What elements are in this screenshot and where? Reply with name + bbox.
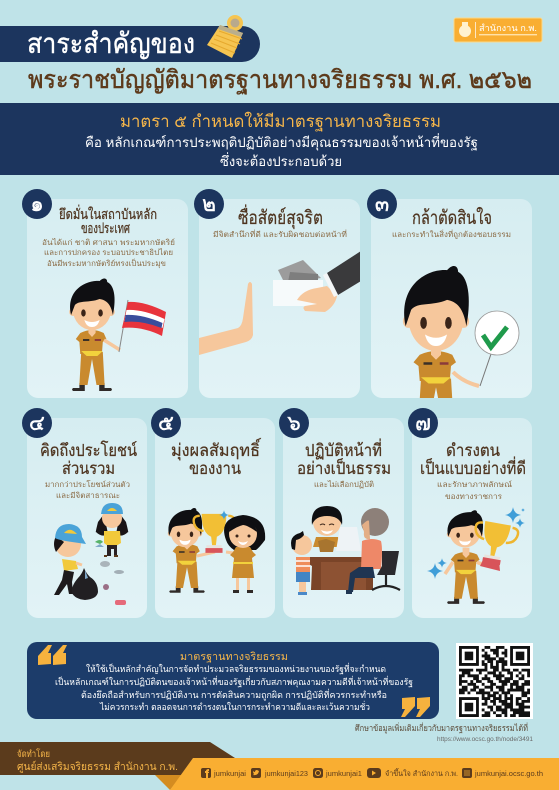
panel: card 1: อันได้แก่ ชาติ ศาสนา พระมหากษัตริย์ <box>42 238 175 247</box>
icon: opening quote <box>38 645 67 665</box>
panel: quote <box>27 642 439 719</box>
icon: twitter <box>251 768 261 778</box>
icon: stamp <box>207 15 243 58</box>
panel: card 3: กล้าตัดสินใจ <box>412 207 492 229</box>
panel: card 2 <box>194 189 361 398</box>
badge 3 <box>367 189 397 219</box>
footer: social links <box>170 758 559 790</box>
badge 1 <box>22 189 52 219</box>
illustration: officer serving citizens at desk <box>291 506 400 595</box>
panel: card 6: ปฏิบัติหน้าที่ <box>305 438 382 460</box>
footer: producer: จัดทำโดย <box>17 748 50 760</box>
title banner <box>0 26 260 62</box>
illustration: officer with Thai flag <box>69 278 166 391</box>
badge 2 <box>194 189 224 219</box>
panel: card 6: อย่างเป็นธรรม <box>297 457 391 478</box>
logo: OCSC <box>454 18 542 42</box>
panel: card 1 <box>22 189 188 398</box>
badge 2: ๒ <box>202 193 216 216</box>
footer: producer <box>0 742 235 790</box>
panel: card 1: และการปกครอง ระบอบประชาธิปไตย <box>44 248 173 257</box>
panel: card 2: มีจิตสำนึกที่ดี และรับผิดชอบต่อหน้าที่ <box>213 229 347 239</box>
icon: youtube <box>367 768 381 778</box>
panel: card 4: มากกว่าประโยชน์ส่วนตัว <box>45 480 130 489</box>
badge 7 <box>408 408 438 438</box>
panel: card 3: และกระทำในสิ่งที่ถูกต้องชอบธรรม <box>392 229 511 239</box>
footer: social links: jumkunjai1 <box>325 769 362 778</box>
panel: card 4: คิดถึงประโยชน์ <box>40 440 137 460</box>
panel: quote: ไม่ควรกระทำ ตลอดจนการดำรงตนในการกระทำความดีและละเว้นความชั่ว <box>99 700 370 712</box>
panel: card 7: ดำรงตน <box>446 441 500 460</box>
panel: card 5: มุ่งผลสัมฤทธิ์ <box>171 438 262 461</box>
panel: quote: ต้องยึดถือสำหรับการปฏิบัติงาน การตัดสินความถูกผิด การปฏิบัติที่ควรกระทำหรือ <box>81 688 387 701</box>
QR caption: https://www.ocsc.go.th/node/3491 <box>437 737 534 743</box>
panel: card 1: อันมีพระมหากษัตริย์ทรงเป็นประมุข <box>47 258 166 268</box>
icon: website <box>462 768 472 778</box>
panel: card 3 <box>367 189 532 398</box>
panel: card 5 <box>151 408 275 618</box>
footer: social links: จำขึ้นใจ สำนักงาน ก.พ. <box>385 768 458 778</box>
illustration: refusing a bribe <box>199 251 361 355</box>
panel: card 5: ของงาน <box>189 459 241 478</box>
panel: quote: เป็นหลักเกณฑ์ในการปฏิบัติตนของเจ้าหน้าที่ของรัฐเกี่ยวกับสภาพคุณงามความดีที่เจ้าหน้าที่ของรัฐ <box>55 675 413 688</box>
badge 7: ๗ <box>415 412 431 435</box>
title banner: สาระสำคัญของ <box>27 28 195 59</box>
footer: social links: jumkunjai <box>213 769 246 778</box>
badge 4: ๔ <box>29 412 45 435</box>
QR code <box>456 643 533 719</box>
icon: instagram <box>313 768 323 778</box>
panel: section 5 band: คือ หลักเกณฑ์การประพฤติปฏิบัติอย่างมีคุณธรรมของเจ้าหน้าที่ของรัฐ <box>85 133 478 151</box>
panel: card 7 <box>408 408 532 618</box>
footer: social links: jumkunjai123 <box>264 769 308 778</box>
panel: card 6: และไม่เลือกปฏิบัติ <box>314 480 374 489</box>
icon: closing quote <box>401 697 430 717</box>
badge 4 <box>22 408 52 438</box>
badge 5 <box>151 408 181 438</box>
illustration: officer with check sign <box>402 266 520 398</box>
panel: card 7: และรักษาภาพลักษณ์ <box>437 480 512 489</box>
panel: card 1: ของประเทศ <box>81 220 130 236</box>
badge 3: ๓ <box>375 193 389 216</box>
panel: card 6 <box>279 408 404 618</box>
panel: quote: มาตรฐานทางจริยธรรม <box>180 651 288 663</box>
panel: card 4 <box>22 408 147 618</box>
panel: card 2: ซื่อสัตย์สุจริต <box>238 204 323 230</box>
badge 5: ๕ <box>158 412 174 435</box>
badge 1: ๑ <box>30 193 44 216</box>
QR caption <box>355 722 534 743</box>
badge 6 <box>279 408 309 438</box>
icon: facebook <box>201 768 211 778</box>
panel: card 4: และมีจิตสาธารณะ <box>56 491 120 500</box>
badge 6: ๖ <box>287 412 301 435</box>
panel: card 7: ของทางราชการ <box>445 492 502 501</box>
panel: section 5 band: ซึ่งจะต้องประกอบด้วย <box>220 152 342 169</box>
heading: พระราชบัญญัติมาตรฐานทางจริยธรรม พ.ศ. ๒๕๖๒ <box>28 66 532 94</box>
illustration: officer with trophy and sparkles <box>427 507 525 604</box>
QR caption: ศึกษาข้อมูลเพิ่มเติมเกี่ยวกับมาตรฐานทางจริยธรรมได้ที่ <box>355 722 528 734</box>
panel: card 4: ส่วนรวม <box>62 459 115 478</box>
panel: section 5 band <box>0 103 559 175</box>
illustration: two officers with trophy <box>168 508 265 593</box>
footer: social links: jumkunjai.ocsc.go.th <box>474 769 543 778</box>
panel: card 1: ยึดมั่นในสถาบันหลัก <box>59 205 157 222</box>
footer: producer: ศูนย์ส่งเสริมจริยธรรม สำนักงาน ก.พ. <box>17 760 178 773</box>
logo: OCSC: สำนักงาน ก.พ. <box>479 23 537 33</box>
illustration: volunteers collecting rubbish <box>54 503 128 605</box>
panel: quote: ให้ใช้เป็นหลักสำคัญในการจัดทำประมวลจริยธรรมของหน่วยงานของรัฐที่จะกำหนด <box>86 662 386 675</box>
panel: section 5 band: มาตรา ๕ กำหนดให้มีมาตรฐานทางจริยธรรม <box>120 111 441 132</box>
panel: card 7: เป็นแบบอย่างที่ดี <box>420 456 526 478</box>
